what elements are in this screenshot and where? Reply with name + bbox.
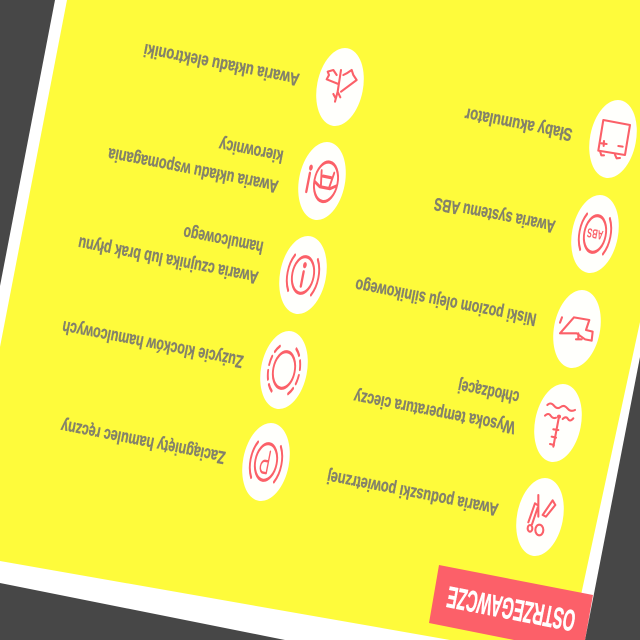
icon: parking brake [247, 441, 285, 483]
text: brake fluid [76, 223, 265, 288]
item: weak battery [463, 96, 640, 182]
item: airbag failure [325, 467, 570, 560]
item: electronics failure [142, 40, 370, 130]
text: power steering: kierownicy [217, 135, 285, 167]
banner: heading [429, 565, 593, 640]
icon: brake with exclamation [284, 254, 322, 296]
text: power steering [106, 135, 285, 197]
item: power steering failure [106, 135, 352, 224]
icon: thermometer in waves [545, 403, 575, 447]
item: ABS failure: Awaria systemu ABS [432, 194, 557, 237]
item: low oil level [353, 275, 607, 372]
text: high temperature: chłodzącej [456, 376, 521, 408]
icon: ABS brake [576, 213, 614, 255]
icon: worn brake pads [264, 344, 304, 396]
icon: airbag [528, 495, 555, 535]
icon: electronics [327, 70, 357, 102]
item: brake pad wear [60, 317, 314, 413]
item: brake fluid sensor failure [76, 223, 333, 318]
text: high temperature [352, 376, 521, 438]
icon: steering wheel with exclamation [304, 159, 341, 204]
item: low oil level: Niski poziom oleju silnikowego [353, 275, 538, 330]
icon: ABS brake: ABS [586, 224, 604, 242]
banner: heading: OSTRZEGAWCZE [444, 580, 578, 637]
icon: battery [598, 120, 630, 158]
item: airbag failure: Awaria poduszki powietrznej [325, 467, 500, 520]
text: high temperature: Wysoka temperatura cieczy [352, 387, 517, 438]
item: handbrake engaged [59, 416, 296, 505]
text: brake fluid: hamulcowego [182, 223, 265, 258]
item: ABS failure [432, 191, 625, 277]
text: power steering: Awaria układu wspomagania [106, 144, 280, 197]
text: brake fluid: Awaria czujnika lub brak płynu [76, 233, 260, 288]
item: high coolant temperature [352, 376, 588, 466]
item: electronics failure: Awaria układu elektroniki [142, 40, 301, 90]
icon: oil can [560, 317, 593, 341]
item: weak battery: Słaby akumulator [463, 104, 574, 145]
